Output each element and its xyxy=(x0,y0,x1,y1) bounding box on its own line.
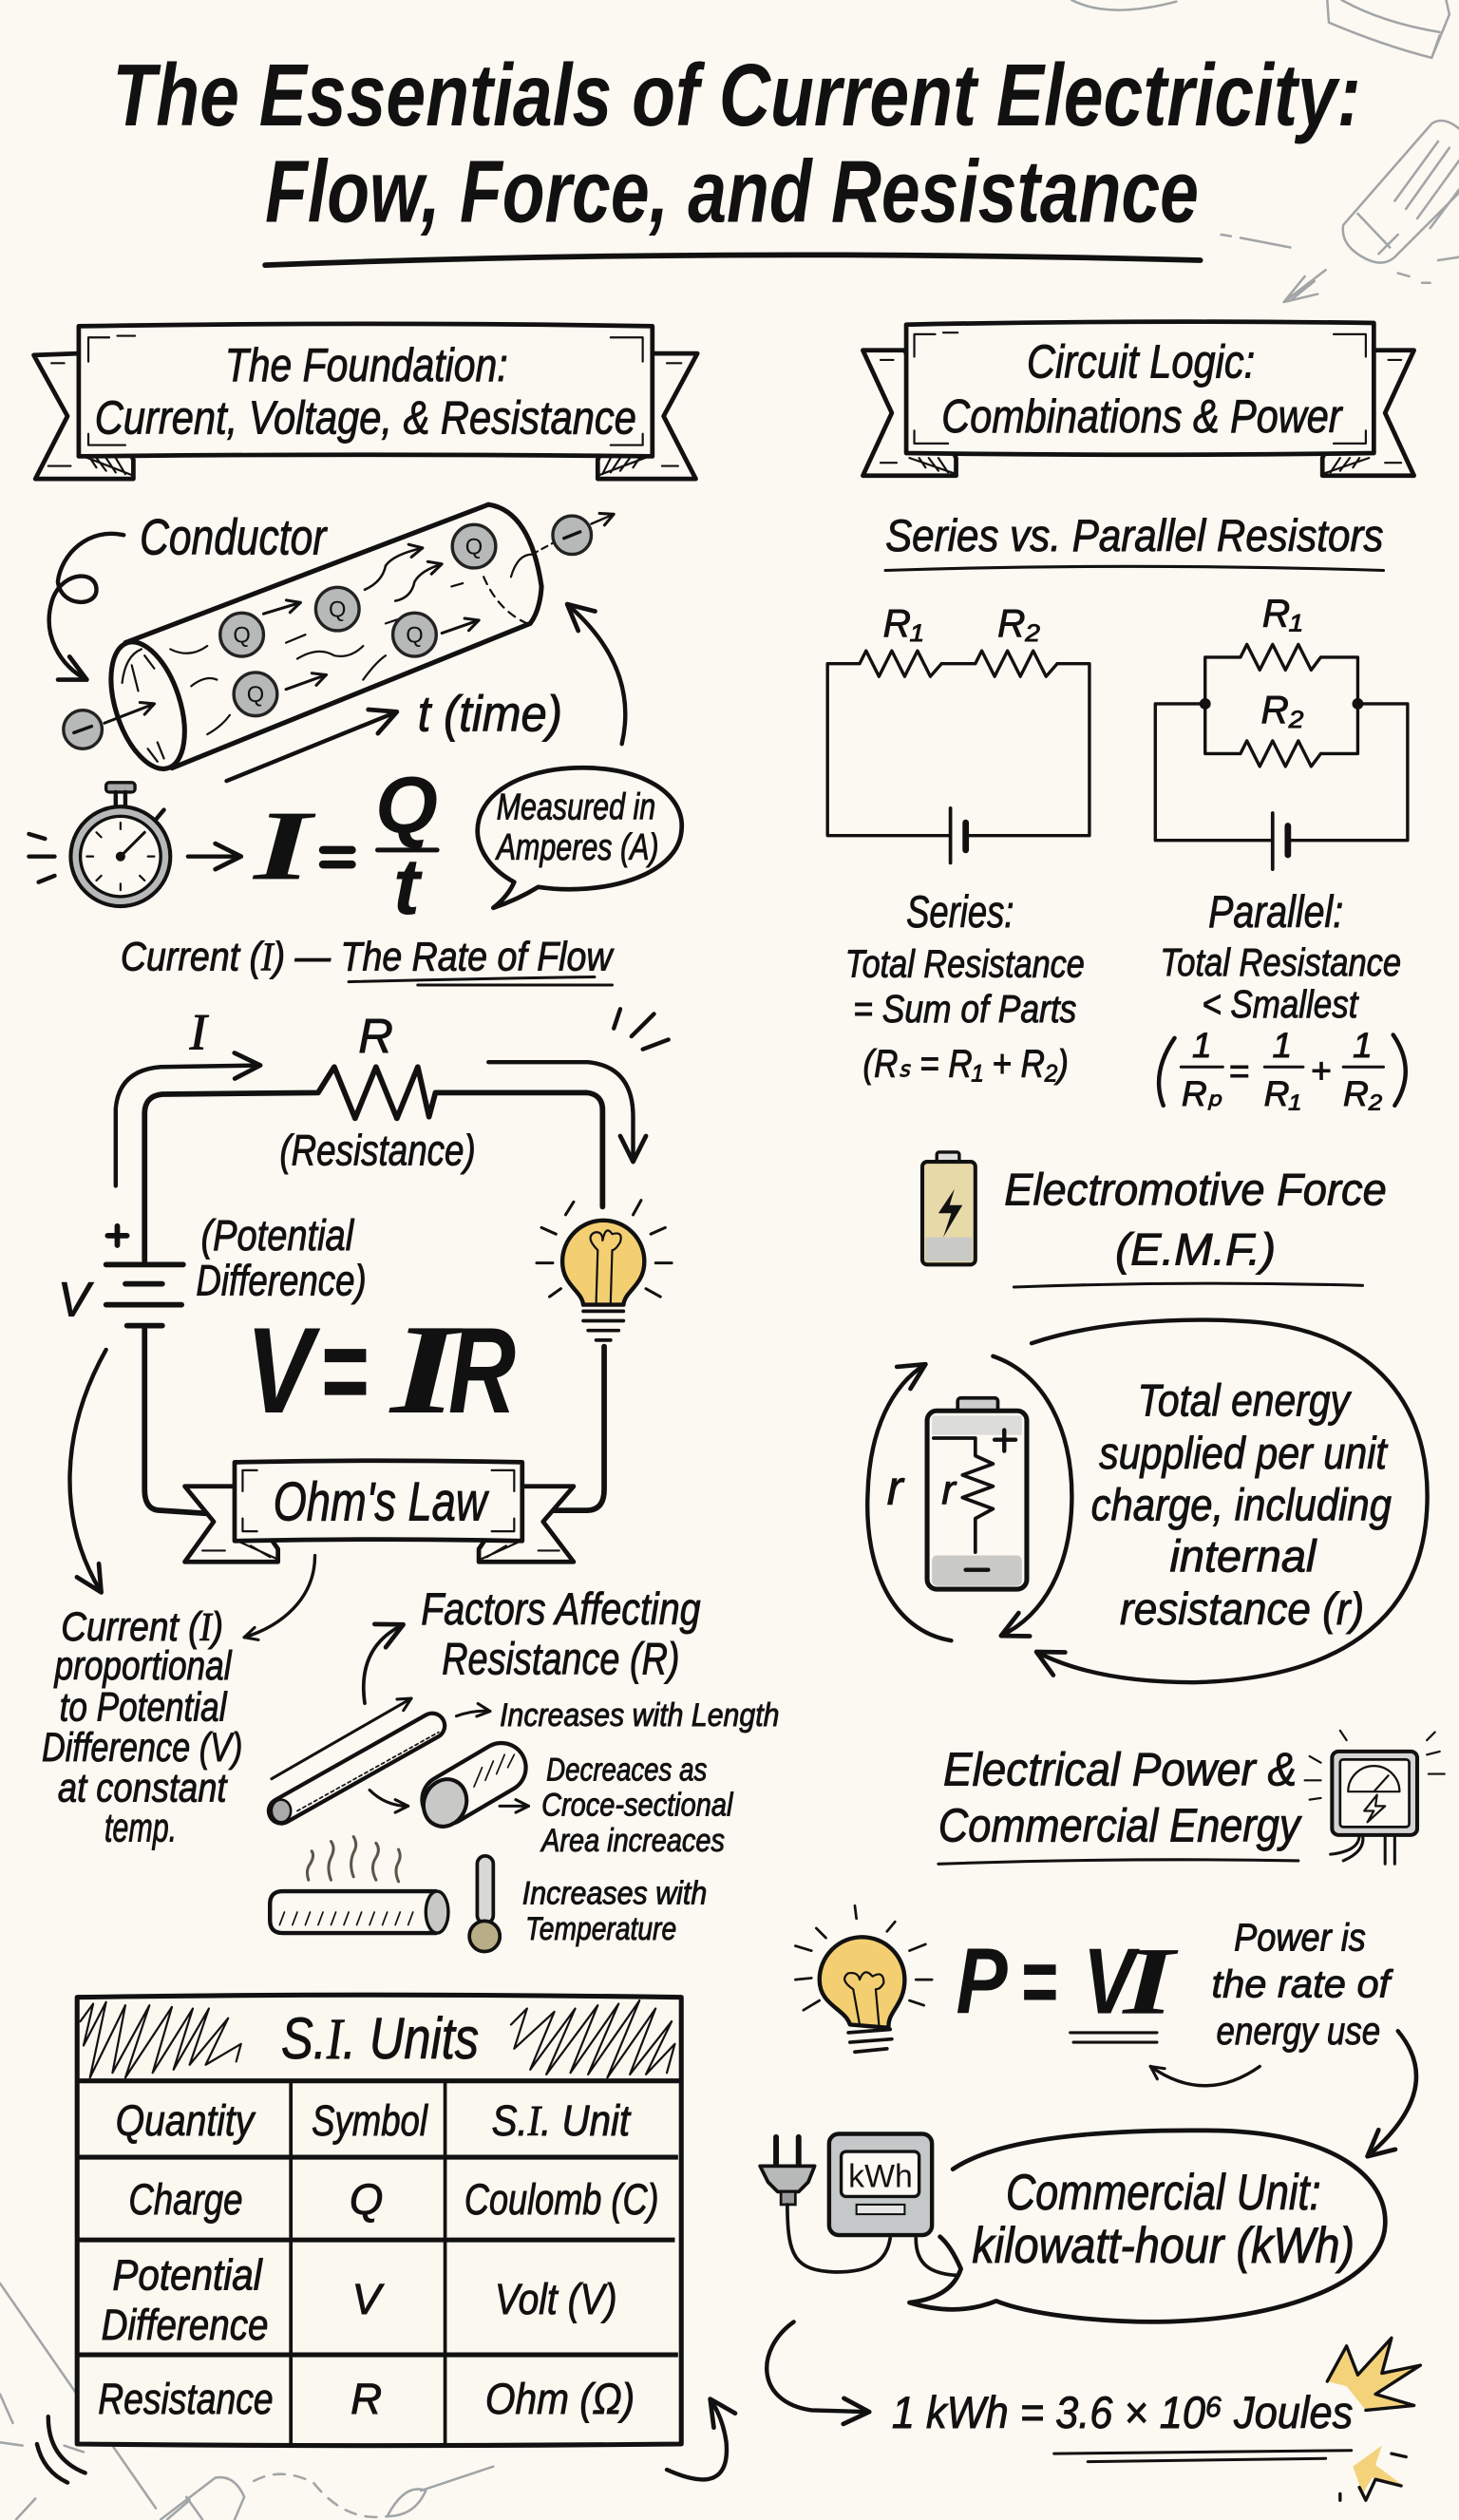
arrow: length over rod xyxy=(272,1698,411,1779)
ribbon: Ohm's law: Ohm's Law xyxy=(274,1471,489,1532)
icon: thick rod xyxy=(416,1754,514,1833)
panel: circuit logic heading ribbon: Circuit Logic: xyxy=(1027,337,1255,388)
table grid xyxy=(77,1995,681,2446)
heading: electromotive force: (E.M.F.) xyxy=(1115,1224,1276,1275)
table header row: Quantity xyxy=(116,2096,256,2145)
label: resistance: (Resistance) xyxy=(279,1126,476,1174)
text: increases with temperature: Temperature xyxy=(525,1911,676,1947)
panel: factors affecting resistance xyxy=(270,1584,779,1951)
table row: potential difference: Potential xyxy=(112,2251,263,2300)
charge carriers: Q xyxy=(329,598,346,623)
formula: P = VI xyxy=(957,1928,1179,2042)
heading: factors xyxy=(421,1584,701,1685)
labels: I and R: R xyxy=(358,1009,393,1063)
heading: electromotive force: Electromotive Force xyxy=(1004,1165,1387,1216)
charge carriers: Q xyxy=(247,683,264,708)
table columns xyxy=(291,2081,445,2444)
table row: charge: Coulomb (C) xyxy=(464,2175,659,2224)
charge carriers: Q xyxy=(233,624,251,649)
series resistor labels xyxy=(883,601,1040,645)
callout: measured in amperes: Measured in xyxy=(497,787,655,828)
label: outer r: r xyxy=(887,1460,905,1514)
callout: commercial unit xyxy=(909,2131,1385,2321)
sparks xyxy=(614,1009,669,1050)
table row: resistance: R xyxy=(351,2375,382,2423)
icon: kWh meter xyxy=(829,2133,957,2275)
text: parallel rule: Parallel: xyxy=(1208,887,1343,938)
text: increases with temperature: Increases with xyxy=(522,1876,707,1912)
icon: long thin rod xyxy=(272,1726,439,1822)
arrow: Ohm's law to statement long xyxy=(69,1350,106,1592)
circuit wire xyxy=(144,1067,604,1514)
icon: kWh meter: kWh xyxy=(848,2158,913,2194)
panel: circuit logic heading ribbon xyxy=(862,322,1414,476)
title xyxy=(112,46,1361,265)
charge carriers: Q xyxy=(406,624,424,649)
panel: foundation heading ribbon: The Foundation: xyxy=(225,340,508,391)
text: series rule: (Rₛ = R₁ + R₂) xyxy=(862,1041,1069,1085)
icon: battery with bolt xyxy=(922,1152,976,1264)
text: increases with temperature xyxy=(522,1876,707,1947)
text: proportional statement: temp. xyxy=(104,1806,177,1850)
arrow: to heading xyxy=(364,1624,404,1703)
text: EMF definition: resistance (r) xyxy=(1120,1584,1364,1635)
formula: P = VI: V xyxy=(1083,1929,1141,2034)
table row: charge xyxy=(128,2175,659,2224)
text: series rule: Total Resistance xyxy=(845,942,1085,986)
formula: V = IR xyxy=(246,1298,516,1441)
parallel resistor labels xyxy=(1261,592,1304,731)
text: power definition xyxy=(1211,1916,1393,2053)
parallel formula xyxy=(1159,1025,1406,1113)
formula: P = VI: P xyxy=(957,1929,1008,2034)
flow arrows xyxy=(104,514,614,723)
labels: I and R xyxy=(189,1004,393,1063)
callout: commercial unit: Commercial Unit: xyxy=(1006,2166,1321,2221)
icon: yellow spark xyxy=(1327,2338,1420,2500)
inner arrows xyxy=(867,1356,1071,1640)
speech loop xyxy=(1032,1320,1428,1682)
formula: I = Q / t: I xyxy=(251,790,316,900)
series resistor labels: R₁ xyxy=(883,601,923,645)
formula: P = VI: I xyxy=(1122,1928,1179,2035)
battery symbol xyxy=(58,1226,183,1326)
callout: commercial unit: kilowatt-hour (kWh) xyxy=(972,2219,1355,2274)
heading: factors: Resistance (R) xyxy=(442,1635,680,1685)
arrow: to cross-section text xyxy=(500,1805,529,1807)
labels: I and R: I xyxy=(189,1004,210,1061)
panel: foundation heading ribbon: Current, Voltage, & Resistance xyxy=(95,393,636,445)
table row: charge: Charge xyxy=(128,2175,242,2224)
arrow: right curve xyxy=(567,604,625,744)
formula: V = IR: = xyxy=(320,1303,368,1439)
icon: heated rod xyxy=(270,1837,448,1933)
arrow: banner to statement xyxy=(244,1556,315,1638)
label: time: t (time) xyxy=(418,688,562,743)
text: cross-section xyxy=(540,1752,734,1859)
text: power definition: the rate of xyxy=(1211,1962,1393,2006)
text: parallel rule: Total Resistance xyxy=(1160,940,1401,984)
table row: potential difference: Volt (V) xyxy=(495,2275,617,2323)
heading: electrical power: Commercial Energy xyxy=(938,1801,1302,1852)
table row: potential difference: V xyxy=(351,2275,384,2323)
text: proportional statement xyxy=(42,1604,242,1850)
table header row: Symbol xyxy=(312,2096,428,2145)
text: cross-section: Croce-sectional xyxy=(541,1788,734,1824)
arrow: to joules conversion xyxy=(767,2321,869,2412)
table header row: S.I. Unit xyxy=(492,2096,632,2145)
text: EMF definition: internal xyxy=(1170,1531,1317,1582)
text: proportional statement: proportional xyxy=(53,1643,233,1688)
table header hatching xyxy=(81,2000,674,2077)
formula: I = Q / t: t xyxy=(393,842,424,932)
text: increases with length: Increases with Length xyxy=(500,1697,779,1734)
parallel formula: R₂ xyxy=(1343,1073,1382,1113)
parallel formula: + xyxy=(1311,1051,1331,1090)
ribbon: Ohm's law xyxy=(185,1461,574,1562)
table row: potential difference xyxy=(102,2251,617,2349)
arrow: to length text xyxy=(456,1711,490,1716)
arrow: stopwatch to formula xyxy=(188,855,241,858)
arrow: time xyxy=(227,711,397,781)
arrow: to formula xyxy=(1150,2066,1260,2086)
table row: potential difference: Difference xyxy=(102,2301,269,2349)
parallel formula: Rₚ xyxy=(1182,1073,1222,1113)
battery symbol: V xyxy=(58,1272,94,1326)
charge carriers: Q xyxy=(465,536,483,560)
section: series vs parallel heading: Series vs. Parallel Resistors xyxy=(885,511,1383,561)
label: potential difference: Difference) xyxy=(196,1256,367,1304)
formula: kWh to joules xyxy=(892,2388,1353,2462)
text: power definition: energy use xyxy=(1217,2009,1380,2053)
formula: V = IR: R xyxy=(448,1303,516,1439)
conductor illustration xyxy=(49,504,625,781)
arrow: current top left xyxy=(116,1066,260,1185)
arrow: rod to thick rod xyxy=(369,1790,408,1806)
background sketches: bottom left xyxy=(0,2283,493,2519)
text: power definition: Power is xyxy=(1234,1916,1366,1960)
parallel formula: 1 xyxy=(1192,1025,1212,1065)
text: proportional statement: Current (I) xyxy=(61,1604,223,1650)
current lines xyxy=(170,543,553,734)
text: cross-section: Decreaces as xyxy=(546,1752,707,1788)
diagram: Ohm's law circuit xyxy=(58,1004,672,1562)
panel: foundation heading ribbon xyxy=(34,324,697,479)
formula: kWh to joules: 1 kWh = 3.6 × 10⁶ Joules xyxy=(892,2388,1353,2438)
heading: electrical power: Electrical Power & xyxy=(943,1744,1297,1795)
text: EMF definition: charge, including xyxy=(1091,1480,1392,1530)
parallel formula: = xyxy=(1228,1051,1249,1090)
formula: I = Q / t: Q xyxy=(375,759,438,849)
table row: resistance: Resistance xyxy=(98,2375,274,2423)
heading: electromotive force xyxy=(1004,1165,1387,1287)
heading: electrical power xyxy=(938,1744,1302,1864)
formula: V = IR: V xyxy=(246,1303,321,1439)
icon: battery with internal resistance xyxy=(927,1398,1027,1589)
text: series rule: = Sum of Parts xyxy=(853,987,1076,1031)
arrow: conductor curl xyxy=(49,534,123,680)
callout: measured in amperes: Amperes (A) xyxy=(495,827,659,868)
caption: current rate of flow: Current (I) — The Rate of Flow xyxy=(121,935,615,980)
table row: charge: Q xyxy=(350,2175,383,2224)
formula: I = Q / t xyxy=(251,759,438,932)
heading: factors: Factors Affecting xyxy=(421,1584,701,1635)
text: proportional statement: to Potential xyxy=(60,1685,228,1730)
icon: plug xyxy=(760,2137,890,2272)
arrow: current top right xyxy=(488,1062,634,1162)
table header row xyxy=(116,2096,632,2145)
diagram: EMF loop xyxy=(867,1320,1428,1682)
label: potential difference xyxy=(196,1211,367,1304)
background sketches: top right xyxy=(1071,0,1459,302)
icon: battery with internal resistance: r xyxy=(941,1467,957,1513)
icon: thermometer xyxy=(469,1856,500,1951)
icon: stopwatch xyxy=(28,783,170,906)
text: cross-section: Area increaces xyxy=(540,1823,725,1859)
diagram: series circuit xyxy=(827,601,1090,862)
table title: S.I. Units xyxy=(281,2006,479,2072)
callout: measured in amperes xyxy=(478,767,682,908)
text: series rule: Series: xyxy=(906,887,1014,938)
parallel formula: 1 xyxy=(1273,1025,1292,1065)
label: conductor: Conductor xyxy=(140,511,328,566)
table row: resistance xyxy=(98,2375,635,2423)
icon: bulb two xyxy=(795,1905,932,2052)
icon: light bulb xyxy=(537,1201,672,1340)
text: series rule xyxy=(845,887,1085,1085)
formula: P = VI: = xyxy=(1020,1929,1057,2034)
text: proportional statement: at constant xyxy=(58,1765,228,1809)
parallel resistor labels: R₁ xyxy=(1262,592,1302,635)
parallel resistor labels: R₂ xyxy=(1261,688,1304,731)
parallel formula: R₁ xyxy=(1264,1073,1300,1113)
text: parallel rule: < Smallest xyxy=(1202,982,1359,1026)
title: Flow, Force, and Resistance xyxy=(265,142,1199,240)
text: EMF definition xyxy=(1091,1375,1392,1635)
parallel formula: 1 xyxy=(1353,1025,1373,1065)
panel: circuit logic heading ribbon: Combinations & Power xyxy=(941,391,1343,443)
text: proportional statement: Difference (V) xyxy=(42,1725,242,1770)
panel: S.I. units table xyxy=(77,1995,682,2446)
icon: power meter xyxy=(1305,1731,1445,1864)
charge carriers xyxy=(64,516,592,748)
table row: resistance: Ohm (Ω) xyxy=(485,2375,635,2423)
label: potential difference: (Potential xyxy=(200,1211,355,1260)
series resistor labels: R₂ xyxy=(997,601,1040,645)
text: parallel rule xyxy=(1159,887,1406,1113)
text: EMF definition: supplied per unit xyxy=(1099,1429,1388,1479)
arrow: to commercial unit xyxy=(1368,2031,1416,2156)
diagram: parallel circuit xyxy=(1155,592,1408,869)
text: EMF definition: Total energy xyxy=(1138,1375,1353,1426)
formula: V = IR: I xyxy=(388,1298,464,1441)
swooshes and arrow around table xyxy=(37,2399,727,2483)
conductor cylinder xyxy=(97,504,541,778)
